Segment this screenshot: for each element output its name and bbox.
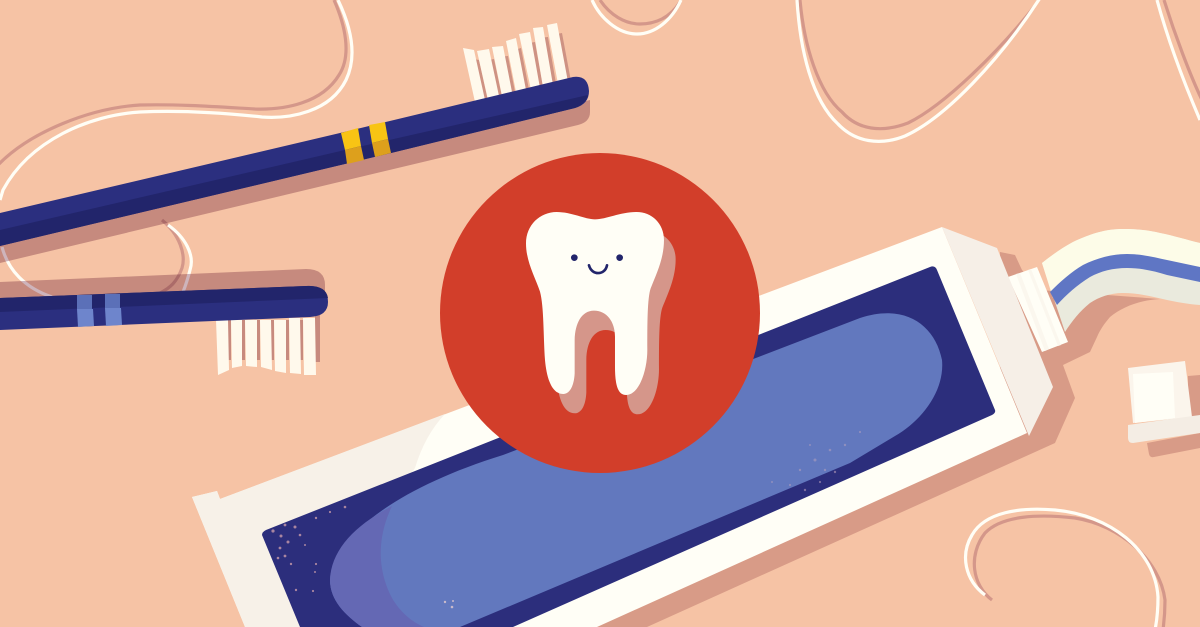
tooth body [526, 212, 664, 395]
paste graphic on label [330, 313, 942, 627]
cap inner highlight [1133, 372, 1175, 423]
squeezed paste [1042, 229, 1200, 332]
red circle [440, 153, 760, 473]
paste graphic shaded left end [330, 506, 424, 627]
upper brush bristles [463, 23, 573, 112]
tooth icon [526, 212, 676, 414]
yellow bands [341, 122, 391, 164]
tooth face [571, 254, 623, 273]
tube body [192, 227, 1027, 627]
toothpaste cap [1128, 361, 1200, 457]
blue bands [77, 294, 122, 327]
lower brush dark stripe [0, 286, 328, 312]
cap shadow [1147, 375, 1200, 457]
upper brush lower shade [0, 95, 588, 246]
cap body [1128, 361, 1192, 423]
tube neck [1008, 267, 1068, 352]
tooth shadow [538, 231, 676, 414]
speckles [271, 431, 861, 608]
cap base [1128, 415, 1200, 443]
lower brush bristles [216, 315, 320, 375]
upper brush handle [0, 77, 589, 246]
tube end cap side [942, 227, 1053, 436]
lower brush handle [0, 286, 328, 330]
toothpaste tube [192, 227, 1200, 627]
toothbrush: upper with yellow bands [0, 23, 590, 263]
lower brush shadow [0, 269, 325, 302]
toothbrush: lower with blue bands [0, 269, 328, 375]
tube label [262, 266, 995, 627]
tube shadow [590, 252, 1160, 627]
upper brush shadow [0, 100, 590, 263]
tube crimped end [192, 414, 445, 627]
